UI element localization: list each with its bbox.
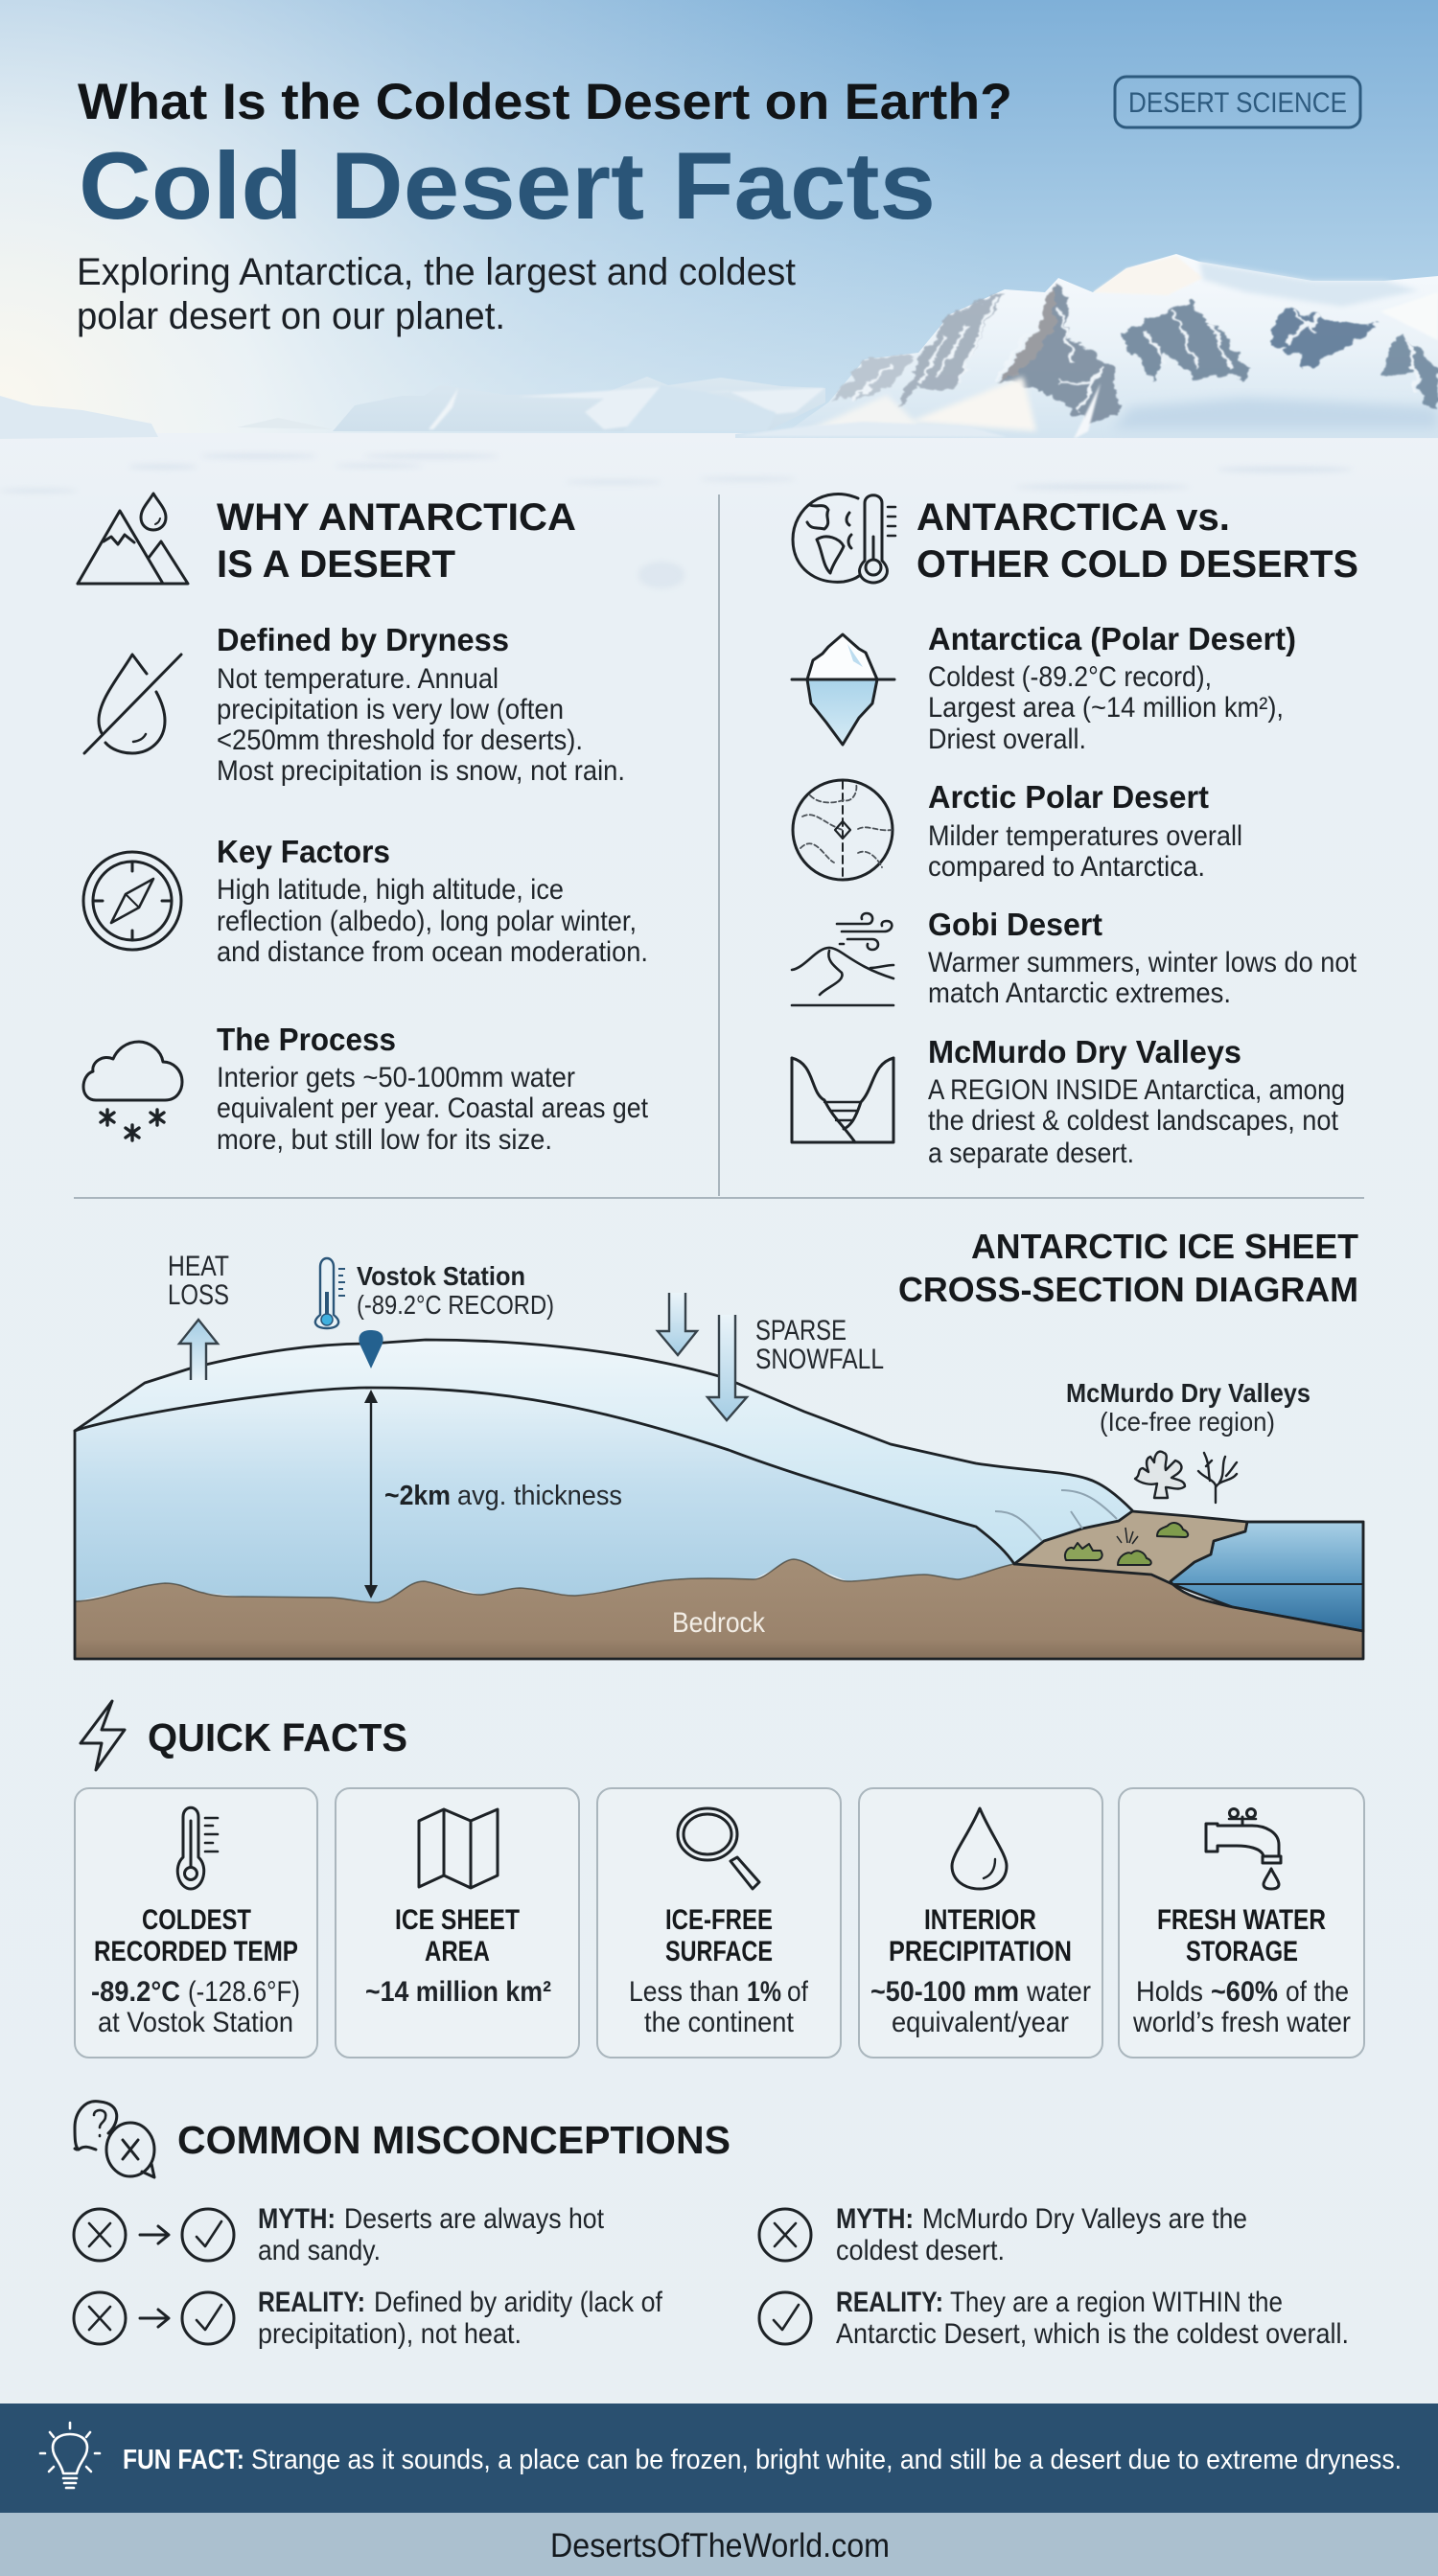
card: coldest recorded temp: COLDEST [142, 1904, 251, 1936]
icon: mountains and droplet [78, 494, 188, 584]
far left ice hill [0, 396, 158, 439]
text block: defined by dryness: Most precipitation is snow, not rain. [217, 755, 625, 787]
text block: the process: equivalent per year. Coastal areas get [217, 1092, 649, 1124]
card: fresh water storage: world’s fresh water [1132, 2007, 1351, 2038]
heading: why antarctica: WHY ANTARCTICA [217, 496, 576, 539]
text: reality within antarctic desert: REALITY: [836, 2287, 943, 2318]
text block: antarctica polar desert: Largest area (~14 million km²), [928, 692, 1284, 724]
icons: myth to fact row one [74, 2209, 234, 2261]
heading: quick facts: QUICK FACTS [148, 1715, 407, 1760]
text: myth mcmurdo: MYTH: [836, 2203, 914, 2235]
footer: DesertsOfTheWorld.com [550, 2527, 890, 2564]
card: fresh water storage [1119, 1788, 1364, 2058]
icon: thermometer [177, 1807, 218, 1889]
icons: myth to fact row two [74, 2292, 234, 2344]
section: quick facts [75, 1701, 1364, 2058]
text block: key factors: High latitude, high altitude, ice [217, 874, 564, 906]
text: reality aridity: Defined by aridity (lack of [374, 2287, 663, 2318]
icon: thermometer [315, 1258, 345, 1328]
outlines [75, 1340, 1363, 1659]
icon: crossed-out droplet [84, 655, 181, 753]
ice-free land [1014, 1511, 1247, 1581]
text block: antarctica polar desert: Coldest (-89.2°C record), [928, 661, 1212, 693]
icon: cloud with snow [83, 1042, 182, 1140]
card: interior precipitation: water [1026, 1976, 1091, 2008]
text: myth mcmurdo: coldest desert. [836, 2235, 1005, 2266]
text block: mcmurdo dry valleys [928, 1034, 1345, 1169]
heading: why antarctica [217, 496, 576, 586]
text block: antarctica polar desert: Driest overall. [928, 724, 1086, 755]
ice sheet body [75, 1388, 1014, 1602]
card: interior precipitation: INTERIOR [924, 1904, 1036, 1936]
bedrock [75, 1559, 1363, 1659]
icon: folded map [419, 1809, 498, 1888]
text: myth hot and sandy: Deserts are always hot [344, 2203, 605, 2235]
card: fresh water storage: ~60% [1211, 1976, 1278, 2008]
subtitle [77, 251, 796, 337]
icon: wind and dune [792, 913, 893, 1005]
card: interior precipitation: PRECIPITATION [889, 1936, 1072, 1967]
card: interior precipitation: equivalent/year [892, 2007, 1069, 2038]
text block: key factors: reflection (albedo), long polar winter, [217, 906, 637, 937]
icon: lightning bolt [81, 1701, 125, 1770]
text: myth mcmurdo [836, 2203, 1247, 2266]
heading: antarctica vs: ANTARCTICA vs. [916, 496, 1230, 539]
text block: the process: The Process [217, 1022, 396, 1057]
text block: arctic polar desert [928, 779, 1242, 883]
label: mcmurdo dry valleys: McMurdo Dry Valleys [1066, 1378, 1310, 1408]
card: ice-free surface [597, 1788, 841, 2058]
icon: iceberg [792, 634, 894, 745]
diagram title: CROSS-SECTION DIAGRAM [898, 1270, 1358, 1309]
text block: gobi desert: Warmer summers, winter lows do not [928, 947, 1357, 978]
text block: gobi desert: Gobi Desert [928, 907, 1102, 942]
label: heat loss with arrow: HEAT [168, 1251, 229, 1282]
card: coldest recorded temp: -89.2°C [91, 1976, 180, 2008]
diagram title: ANTARCTIC ICE SHEET [971, 1227, 1358, 1266]
section: common misconceptions [74, 2102, 1349, 2350]
ice-free flora icons [1135, 1452, 1237, 1503]
text: reality aridity: REALITY: [258, 2287, 365, 2318]
snowfall arrows and label: SNOWFALL [755, 1344, 884, 1375]
panel: why antarctica is a desert [78, 494, 649, 1156]
text block: key factors: Key Factors [217, 834, 390, 869]
text block: mcmurdo dry valleys: A REGION INSIDE Antarctica, among [928, 1074, 1345, 1106]
divider lines [74, 494, 1364, 1198]
text: reality within antarctic desert: They are a region WITHIN the [950, 2287, 1283, 2318]
icon: compass [83, 852, 181, 950]
thickness arrow and label [364, 1390, 622, 1598]
badge: desert science [1115, 77, 1360, 127]
text block: key factors [217, 834, 648, 968]
text block: defined by dryness: Defined by Dryness [217, 622, 509, 657]
icon: question and cross speech bubbles [75, 2102, 154, 2177]
card: ice sheet area [336, 1788, 579, 2058]
label: heat loss with arrow [168, 1251, 229, 1380]
card: ice sheet area: AREA [425, 1936, 490, 1967]
snowfall arrows and label: SPARSE [755, 1315, 847, 1346]
text: myth hot and sandy: MYTH: [258, 2203, 336, 2235]
card: coldest recorded temp: (-128.6°F) [188, 1976, 300, 2008]
heading: why antarctica: IS A DESERT [217, 543, 455, 586]
card: ice-free surface: of [787, 1976, 809, 2008]
fun fact text: FUN FACT: [123, 2445, 244, 2475]
heading: common misconceptions: COMMON MISCONCEPTIONS [177, 2118, 731, 2162]
thickness arrow and label: ~2km [384, 1481, 451, 1511]
text block: antarctica polar desert [928, 621, 1296, 755]
snowfall arrows and label [658, 1293, 884, 1420]
card: ice-free surface: ICE-FREE [665, 1904, 773, 1936]
card: ice-free surface: Less than [629, 1976, 739, 2008]
text: myth hot and sandy [258, 2203, 605, 2266]
rock faces [832, 285, 1438, 422]
card: ice-free surface: SURFACE [665, 1936, 773, 1967]
label: mcmurdo dry valleys: (Ice-free region) [1100, 1407, 1275, 1437]
snow streaks on rock [853, 297, 1417, 412]
text block: gobi desert: match Antarctic extremes. [928, 978, 1231, 1009]
text block: mcmurdo dry valleys: McMurdo Dry Valleys [928, 1034, 1241, 1070]
subtitle: Exploring Antarctica, the largest and coldest [77, 251, 796, 293]
text block: mcmurdo dry valleys: a separate desert. [928, 1138, 1134, 1169]
main title: Cold Desert Facts [79, 132, 936, 239]
badge: desert science: DESERT SCIENCE [1128, 87, 1347, 119]
text block: arctic polar desert: Milder temperatures overall [928, 820, 1242, 852]
text block: arctic polar desert: Arctic Polar Desert [928, 779, 1209, 815]
text block: the process: more, but still low for its size. [217, 1124, 552, 1156]
distant mountains [237, 377, 825, 431]
card: ice-free surface: the continent [644, 2007, 795, 2038]
card: ice sheet area: ICE SHEET [395, 1904, 520, 1936]
card: coldest recorded temp: RECORDED TEMP [94, 1936, 298, 1967]
label: vostok station [315, 1258, 554, 1328]
banner: fun fact [0, 2404, 1438, 2513]
text: myth mcmurdo: McMurdo Dry Valleys are the [922, 2203, 1247, 2235]
icon: water tap [1206, 1809, 1281, 1889]
icon: reality check [759, 2292, 811, 2344]
icon: myth cross [759, 2209, 811, 2261]
diagram title [898, 1227, 1358, 1309]
card: fresh water storage: FRESH WATER [1157, 1904, 1326, 1936]
text: reality within antarctic desert [836, 2287, 1349, 2350]
heading: antarctica vs: OTHER COLD DESERTS [916, 543, 1358, 586]
card: fresh water storage: Holds [1136, 1976, 1203, 2008]
card: coldest recorded temp [75, 1788, 317, 2058]
label: vostok station: (-89.2°C RECORD) [357, 1290, 554, 1320]
text block: key factors: and distance from ocean moderation. [217, 936, 648, 968]
icon: magnifying glass [678, 1808, 759, 1889]
icon: light bulb [40, 2423, 100, 2488]
thickness arrow and label: avg. thickness [457, 1481, 622, 1511]
text: myth hot and sandy: and sandy. [258, 2235, 381, 2266]
diagram: antarctic ice sheet cross-section [75, 1227, 1363, 1659]
text: reality aridity: precipitation), not heat. [258, 2318, 522, 2350]
main snowy mountain [735, 254, 1438, 439]
text: reality aridity [258, 2287, 663, 2350]
sunlit lower slopes [910, 377, 1036, 431]
plants and bushes [1065, 1523, 1188, 1565]
header tagline: question heading: What Is the Coldest Desert on Earth? [78, 74, 1012, 130]
label: heat loss with arrow: LOSS [168, 1279, 229, 1311]
icon: water drop [952, 1808, 1007, 1889]
ice surface layer [75, 1340, 1132, 1564]
icon: valley cross-section [792, 1058, 893, 1142]
card: ice sheet area: ~14 million km² [365, 1976, 551, 2008]
text: reality within antarctic desert: Antarctic Desert, which is the coldest overall. [836, 2318, 1349, 2350]
text block: mcmurdo dry valleys: the driest & coldest landscapes, not [928, 1105, 1339, 1137]
icon: globe and thermometer [793, 494, 895, 583]
card: coldest recorded temp: at Vostok Station [98, 2007, 293, 2038]
label: bedrock: Bedrock [672, 1607, 766, 1639]
heading: antarctica vs [916, 496, 1358, 586]
text block: arctic polar desert: compared to Antarctica. [928, 851, 1205, 883]
text block: defined by dryness [217, 622, 625, 787]
text block: gobi desert [928, 907, 1357, 1009]
footer [0, 2513, 1438, 2576]
panel: antarctica vs other cold deserts [792, 494, 1358, 1169]
text block: defined by dryness: <250mm threshold for deserts). [217, 724, 583, 756]
text block: the process: Interior gets ~50-100mm water [217, 1062, 575, 1093]
ocean [1171, 1522, 1363, 1631]
card: fresh water storage: of the [1286, 1976, 1349, 2008]
label: vostok station: Vostok Station [357, 1261, 525, 1291]
crevasse lines [995, 1490, 1117, 1541]
text block: defined by dryness: Not temperature. Annual [217, 663, 499, 695]
card: ice-free surface: 1% [747, 1976, 781, 2008]
text block: defined by dryness: precipitation is very low (often [217, 694, 564, 725]
card: interior precipitation [859, 1788, 1102, 2058]
icon: arctic map globe [793, 780, 893, 880]
text block: the process [217, 1022, 649, 1156]
text block: antarctica polar desert: Antarctica (Polar Desert) [928, 621, 1296, 656]
icon: location pin [359, 1330, 383, 1368]
subtitle: polar desert on our planet. [77, 295, 505, 337]
label: mcmurdo dry valleys [1066, 1378, 1310, 1437]
card: interior precipitation: ~50-100 mm [870, 1976, 1019, 2008]
card: fresh water storage: STORAGE [1186, 1936, 1298, 1967]
